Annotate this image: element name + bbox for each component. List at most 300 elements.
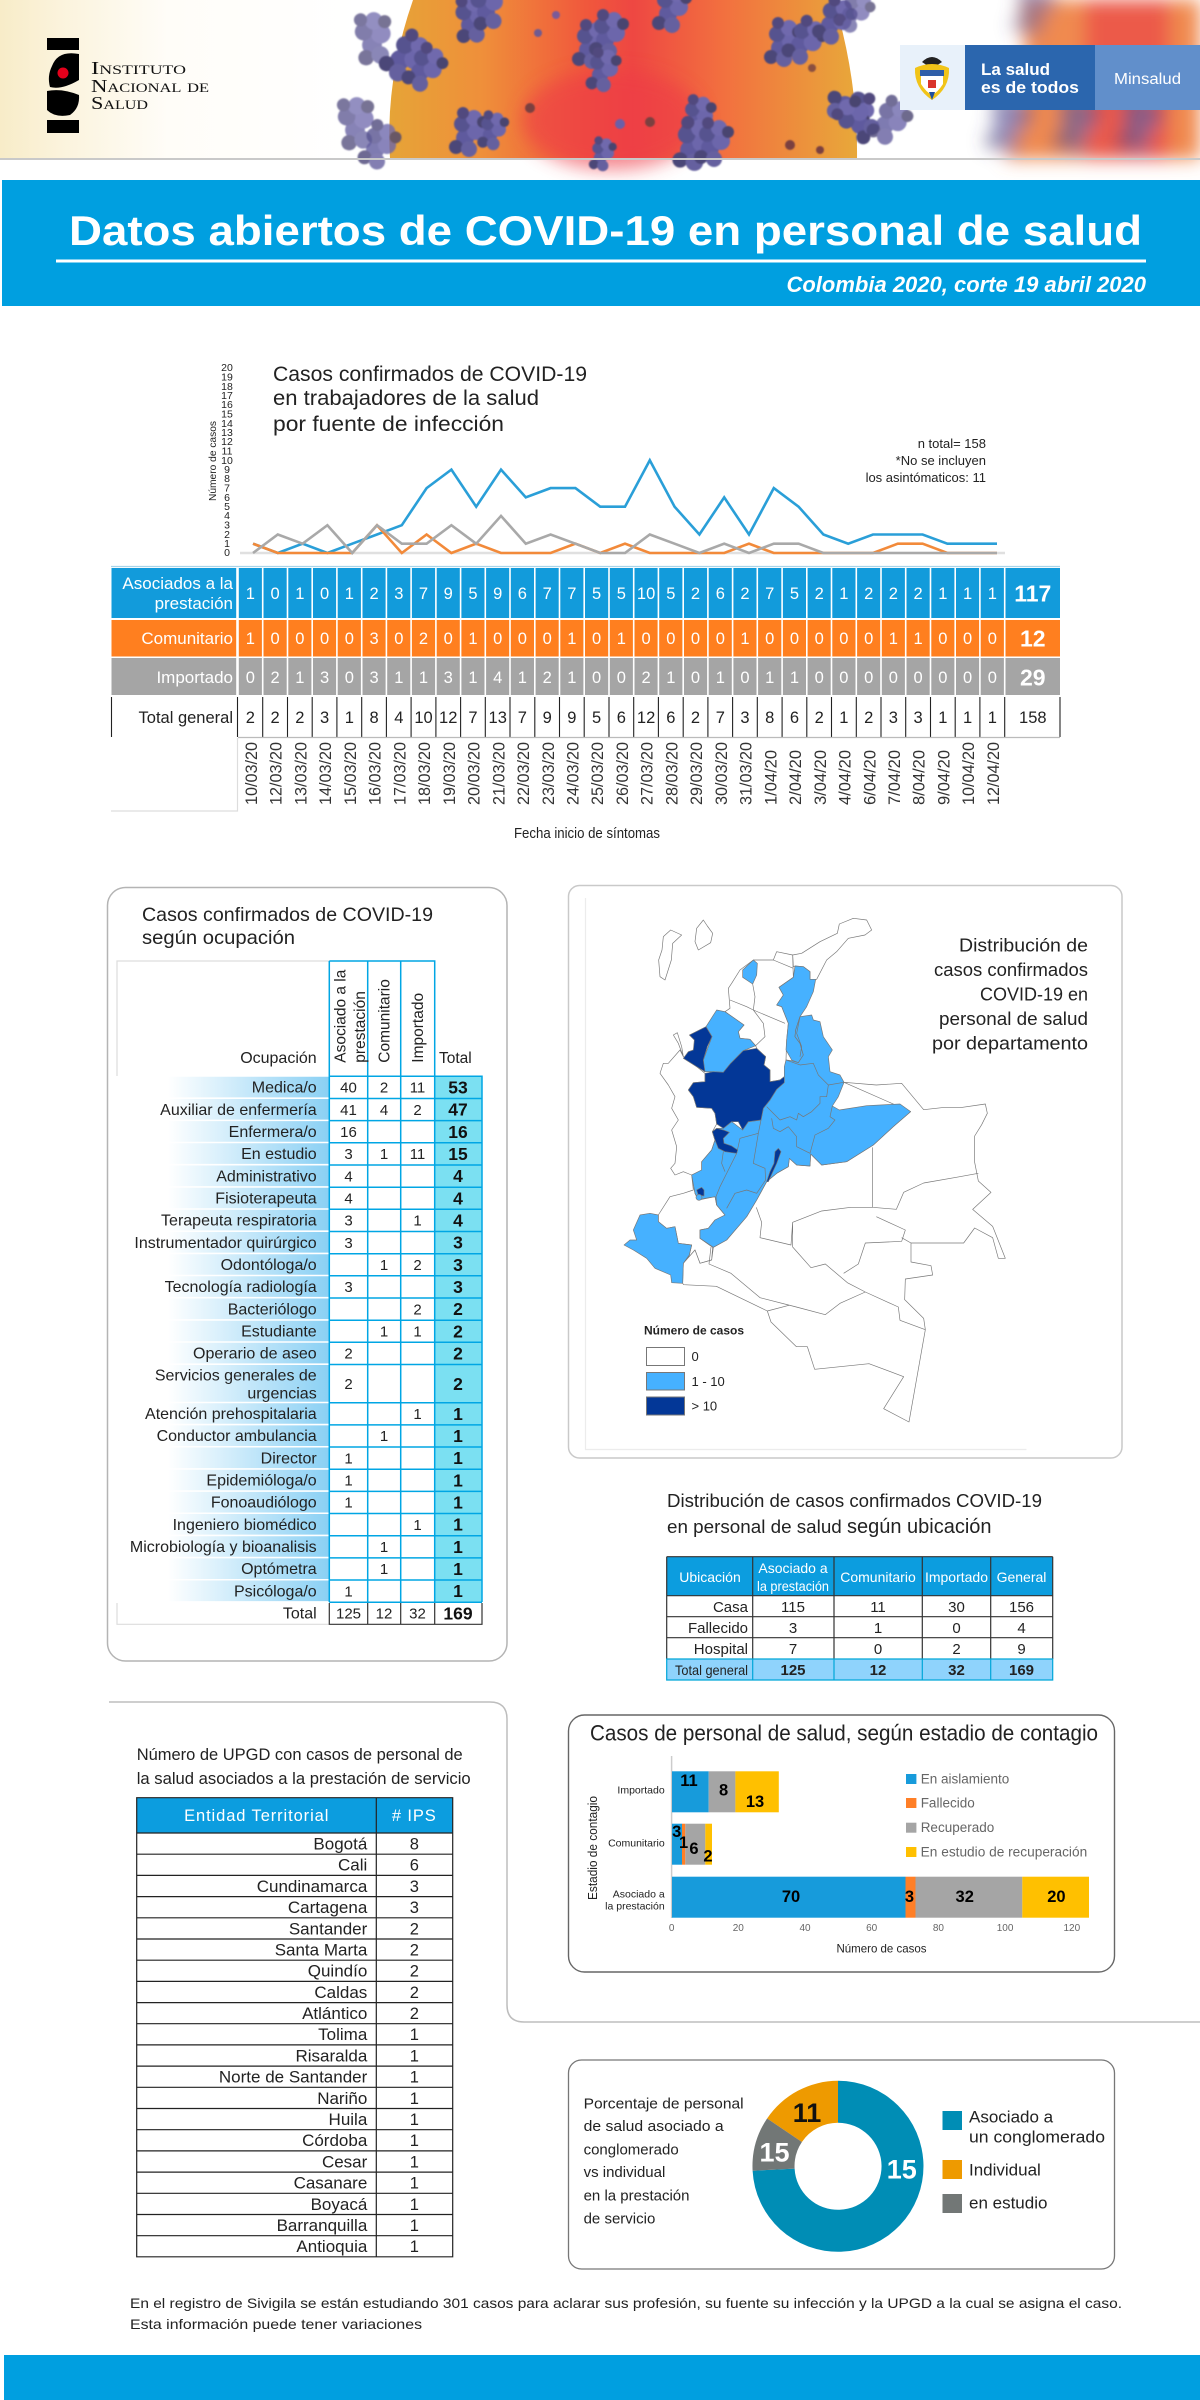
- chart note: n total= 158: [918, 436, 986, 451]
- title: Datos abiertos de COVID-19 en personal de salud: [69, 207, 1142, 254]
- row: Total general: 9: [567, 709, 576, 727]
- y axis labels: 2: [224, 529, 230, 541]
- row: Asociados a la prestación: 7: [419, 585, 428, 603]
- row: Comunitario: 0: [320, 630, 329, 648]
- table body text: 0: [874, 1641, 882, 1658]
- date labels: 12/04/20: [985, 742, 1003, 805]
- row: Comunitario: 1: [740, 630, 750, 648]
- totals column: 169: [443, 1604, 473, 1624]
- row: Total general: Total general: [139, 709, 233, 727]
- map title: personal de salud: [939, 1009, 1088, 1029]
- logo: Instituto Nacional de Salud: [47, 38, 209, 133]
- row: Comunitario: 0: [518, 630, 527, 648]
- column headers: Ocupación: [240, 1050, 317, 1067]
- y axis labels: 14: [221, 418, 233, 430]
- row: Comunitario: 0: [394, 630, 403, 648]
- row labels: Administrativo: [216, 1168, 317, 1185]
- row: Total general: 4: [394, 709, 403, 727]
- row: Importado: 0: [815, 669, 824, 687]
- row: Comunitario: [112, 620, 1060, 656]
- table header text: [679, 1560, 1046, 1594]
- row labels: Fisioterapeuta: [215, 1190, 317, 1208]
- table body text: 32: [948, 1662, 965, 1679]
- cell values: 125: [336, 1606, 361, 1623]
- row: Total general: 8: [765, 709, 774, 727]
- row labels: Enfermera/o: [229, 1124, 317, 1141]
- donut description: vs individual: [584, 2164, 665, 2181]
- row: Asociados a la prestación: prestación: [155, 594, 233, 613]
- cell values: 3: [344, 1146, 353, 1163]
- row: Asociados a la prestación: 0: [271, 585, 280, 603]
- row: Total general: 3: [914, 709, 923, 727]
- bars: Asociado a la prestación: 3: [905, 1888, 914, 1906]
- map legend: Número de casos: [644, 1324, 744, 1338]
- table body text: 156: [1009, 1599, 1034, 1616]
- y axis labels: 6: [224, 492, 230, 504]
- cell values: 32: [409, 1606, 426, 1623]
- row: Comunitario: 1: [567, 630, 576, 648]
- table body text: Total general: [675, 1662, 748, 1678]
- y axis labels: 11: [222, 446, 233, 458]
- totals column: 4: [453, 1188, 463, 1208]
- table body text: 4: [1017, 1620, 1026, 1637]
- row: Importado: 0: [246, 669, 255, 687]
- row: Asociados a la prestación: 1: [938, 585, 947, 603]
- row labels: Tecnología radiología: [165, 1279, 317, 1296]
- row labels: [130, 1080, 317, 1623]
- territorial entities: 1: [410, 2090, 419, 2108]
- logo: La salud es de todos / Minsalud: [900, 45, 1200, 110]
- territorial entities: 2: [410, 1920, 419, 1938]
- table body text: 169: [1009, 1662, 1034, 1679]
- cell values: 16: [340, 1124, 357, 1141]
- cell values: 3: [344, 1279, 353, 1296]
- row: Total general: 1: [345, 709, 354, 727]
- map legend: 1 - 10: [692, 1374, 725, 1389]
- white departments: [793, 918, 872, 979]
- row: Total general: 2: [815, 709, 824, 727]
- donut legend: en estudio: [969, 2193, 1047, 2212]
- date labels: 20/03/20: [466, 742, 484, 805]
- date labels: 13/03/20: [292, 742, 310, 805]
- row: Comunitario: 0: [543, 630, 552, 648]
- row: Importado: 29: [1020, 664, 1046, 690]
- table header text: Asociado a: [758, 1560, 828, 1576]
- row: Total general: 5: [592, 709, 601, 727]
- date labels: 17/03/20: [391, 742, 409, 805]
- row: Asociados a la prestación: 6: [716, 585, 725, 603]
- row: Total general: 1: [988, 709, 997, 727]
- department borders: [716, 1017, 844, 1208]
- row: Asociados a la prestación: 9: [444, 585, 453, 603]
- table body text: Casa: [713, 1599, 749, 1616]
- logo: La salud es de todos / Minsalud: Minsalud: [1114, 71, 1181, 88]
- row: Comunitario: 0: [839, 630, 848, 648]
- row: Importado: 2: [642, 669, 651, 687]
- map title: por departamento: [932, 1033, 1088, 1053]
- date labels: [111, 738, 1003, 811]
- cell values: 1: [413, 1406, 422, 1423]
- bar legend: En aislamiento: [921, 1772, 1009, 1786]
- y axis labels: 5: [224, 501, 230, 513]
- table header text: Entidad Territorial: [184, 1807, 329, 1825]
- occupation table: [117, 961, 482, 1624]
- icon: coat of arms: [915, 57, 949, 100]
- territorial entities: Cundinamarca: [257, 1877, 368, 1896]
- bar legend: Fallecido: [921, 1796, 975, 1811]
- row: Asociados a la prestación: 9: [493, 585, 502, 603]
- panel: cases by location: [667, 1491, 1053, 1680]
- column headers: [240, 969, 472, 1067]
- territorial entities: Casanare: [294, 2174, 367, 2193]
- cell values: 1: [380, 1257, 388, 1274]
- totals column: 47: [448, 1100, 468, 1120]
- donut legend: Asociado a: [969, 2108, 1054, 2127]
- y axis labels: 19: [221, 372, 233, 384]
- category labels: Asociado a: [613, 1889, 665, 1901]
- totals column: 15: [448, 1144, 468, 1164]
- category labels: [605, 1785, 665, 1912]
- row labels: Conductor ambulancia: [157, 1428, 317, 1445]
- row: Asociados a la prestación: 1: [839, 585, 848, 603]
- x axis title: Número de casos: [836, 1942, 926, 1956]
- row: Asociados a la prestación: 2: [691, 585, 700, 603]
- y axis labels: 20: [221, 362, 233, 374]
- totals column: 1: [453, 1537, 463, 1557]
- row: Asociados a la prestación: 0: [320, 585, 329, 603]
- territorial entities: 3: [410, 1899, 419, 1917]
- row: Importado: 1: [666, 669, 675, 687]
- logo: Instituto Nacional de Salud: Salud: [91, 93, 148, 113]
- panel: stacked bar chart by contagion stage: [568, 1715, 1114, 1972]
- bars: Importado: 11: [680, 1772, 698, 1790]
- bar legend: En estudio de recuperación: [921, 1844, 1087, 1860]
- x axis ticks: 40: [799, 1923, 811, 1934]
- panel: cases by occupation: [108, 888, 507, 1661]
- row: Asociados a la prestación: 2: [370, 585, 379, 603]
- row: Comunitario: 0: [271, 630, 280, 648]
- territorial entities: Cali: [338, 1856, 367, 1875]
- row: Importado: 0: [963, 669, 972, 687]
- panel: map by department: [568, 886, 1122, 1458]
- date labels: 8/04/20: [911, 750, 929, 805]
- cell values: 2: [344, 1346, 353, 1363]
- date labels: 22/03/20: [515, 742, 533, 805]
- row label gradient bands: [168, 1077, 329, 1601]
- territorial entities: 1: [410, 2047, 419, 2065]
- totals column: 2: [453, 1299, 463, 1319]
- row: Comunitario: 0: [765, 630, 774, 648]
- row: Total general: [112, 697, 1060, 738]
- row: Comunitario: 1: [889, 630, 898, 648]
- row: Total general: 3: [889, 709, 898, 727]
- column headers: Importado: [410, 993, 427, 1063]
- totals column: 16: [448, 1122, 468, 1142]
- row labels: Fonoaudiólogo: [211, 1495, 317, 1512]
- totals column: 1: [453, 1515, 463, 1535]
- row: Comunitario: 1: [468, 630, 478, 648]
- totals column: 2: [453, 1374, 463, 1394]
- territorial entities: [219, 1834, 419, 2256]
- date labels: 14/03/20: [317, 742, 335, 805]
- row: Total general: 2: [271, 709, 280, 727]
- row: Importado: 0: [617, 669, 626, 687]
- row: Comunitario: 3: [370, 630, 379, 648]
- table body text: 1: [874, 1620, 882, 1637]
- row: Comunitario: 0: [988, 630, 997, 648]
- bars: Asociado a la prestación: [672, 1877, 1089, 1918]
- row: Comunitario: 0: [493, 630, 502, 648]
- date labels: 27/03/20: [639, 742, 657, 805]
- y axis title: Número de casos: [207, 421, 219, 501]
- totals column: 4: [453, 1210, 463, 1230]
- territorial entities: 2: [410, 1942, 419, 1960]
- y axis labels: 7: [224, 482, 230, 494]
- line chart heading: en trabajadores de la salud: [273, 387, 539, 410]
- territorial entities: Caldas: [314, 1983, 367, 2002]
- row: Total general: 7: [468, 709, 478, 727]
- row labels: Epidemióloga/o: [206, 1472, 317, 1490]
- row: Asociados a la prestación: 5: [790, 585, 799, 603]
- logo: Instituto Nacional de Salud: Nacional de: [91, 76, 209, 96]
- location heading: [667, 1491, 1042, 1538]
- cell values: 2: [413, 1301, 422, 1318]
- date labels: 28/03/20: [663, 742, 681, 805]
- row: Asociados a la prestación: 7: [543, 585, 552, 603]
- category labels: Comunitario: [608, 1838, 665, 1850]
- row: Importado: 1: [468, 669, 478, 687]
- row: Asociados a la prestación: [112, 568, 1060, 618]
- logo: La salud es de todos / Minsalud: La salud: [981, 60, 1050, 79]
- cell values: 1: [344, 1583, 353, 1600]
- territorial entities: 8: [410, 1836, 419, 1854]
- row labels: Total: [283, 1606, 317, 1623]
- map title: [932, 936, 1088, 1053]
- territorial entities: Atlántico: [302, 2004, 367, 2023]
- footer band: [4, 2355, 1200, 2400]
- row labels: Atención prehospitalaria: [145, 1406, 317, 1423]
- row: Asociados a la prestación: 2: [815, 585, 824, 603]
- row: Comunitario: 0: [691, 630, 700, 648]
- row: Importado: 0: [592, 669, 601, 687]
- y axis labels: 9: [224, 464, 230, 476]
- row: Total general: 3: [740, 709, 750, 727]
- row: Comunitario: 0: [295, 630, 304, 648]
- totals column: 1: [453, 1559, 463, 1579]
- totals column: 1: [453, 1493, 463, 1513]
- row: Asociados a la prestación: 1: [295, 585, 304, 603]
- table body text: 3: [789, 1620, 797, 1637]
- row: Importado: 0: [914, 669, 923, 687]
- column headers: Comunitario: [376, 979, 394, 1063]
- date labels: 26/03/20: [614, 742, 632, 805]
- x axis ticks: 20: [733, 1923, 744, 1934]
- territorial entities: Norte de Santander: [219, 2068, 368, 2087]
- chart note: *No se incluyen: [896, 453, 986, 468]
- cell values: 4: [380, 1102, 388, 1119]
- row: Total general: 1: [963, 709, 972, 727]
- row: Comunitario: 1: [914, 630, 923, 648]
- territorial entities: Antioquia: [296, 2237, 368, 2256]
- line chart heading: Casos confirmados de COVID-19: [273, 363, 587, 386]
- cell values: 3: [344, 1213, 353, 1230]
- row labels: Ingeniero biomédico: [173, 1517, 317, 1534]
- date labels: 3/04/20: [812, 750, 830, 805]
- date labels: 19/03/20: [441, 742, 459, 805]
- y axis labels: 13: [221, 427, 233, 439]
- row: Importado: 1: [419, 669, 428, 687]
- totals column: 3: [453, 1255, 463, 1275]
- row: Total general: 9: [543, 709, 552, 727]
- cell values: 1: [344, 1472, 353, 1490]
- bars: Comunitario: 3: [672, 1823, 681, 1841]
- row: Importado: 3: [320, 669, 329, 687]
- bars: Asociado a la prestación: 20: [1047, 1888, 1066, 1906]
- table body text: 125: [780, 1662, 806, 1679]
- table body text: Fallecido: [688, 1620, 748, 1637]
- bar legend: Recuperado: [921, 1820, 994, 1835]
- subtitle: Colombia 2020, corte 19 abril 2020: [786, 272, 1147, 297]
- map legend: > 10: [692, 1398, 717, 1414]
- date labels: 9/04/20: [935, 750, 953, 805]
- row: Asociados a la prestación: Asociados a la: [122, 574, 234, 593]
- row: Comunitario: 1: [617, 630, 626, 648]
- row: Asociados a la prestación: 10: [637, 585, 655, 603]
- row: Comunitario: Comunitario: [141, 629, 233, 648]
- location heading: Distribución de casos confirmados COVID-19: [667, 1491, 1042, 1511]
- row: Importado: 1: [765, 669, 774, 687]
- table header text: [184, 1807, 437, 1825]
- row: Importado: 1: [716, 669, 725, 687]
- totals column: [443, 1078, 473, 1624]
- cell values: 40: [340, 1080, 357, 1097]
- territorial entities: 1: [410, 2217, 419, 2235]
- row labels: Terapeuta respiratoria: [161, 1213, 317, 1230]
- row: Asociados a la prestación: 1: [345, 585, 354, 603]
- cell values: 12: [376, 1606, 392, 1623]
- line chart heading: por fuente de infección: [273, 413, 504, 436]
- row: Total general: 12: [439, 709, 457, 727]
- column headers: Total: [439, 1050, 472, 1067]
- UPGD table: [137, 1798, 453, 2257]
- row: Comunitario: 0: [345, 630, 354, 648]
- cell values: 1: [380, 1561, 388, 1578]
- row: Asociados a la prestación: 5: [666, 585, 675, 603]
- row: Importado: 2: [271, 669, 280, 687]
- territorial entities: 1: [410, 2026, 419, 2044]
- row labels: Servicios generales de: [155, 1368, 317, 1385]
- row: Total general: 6: [666, 709, 675, 727]
- x axis ticks: 120: [1063, 1923, 1081, 1934]
- dark blue departments: [688, 1048, 784, 1130]
- territorial entities: Huila: [329, 2110, 368, 2129]
- bars: Importado: [672, 1771, 779, 1812]
- map title: casos confirmados: [934, 960, 1088, 980]
- row: Total general: 3: [320, 709, 329, 727]
- cell values: 3: [344, 1235, 353, 1252]
- table header text: Comunitario: [840, 1569, 916, 1585]
- territorial entities: Cartagena: [288, 1898, 368, 1917]
- table header text: Ubicación: [679, 1569, 741, 1585]
- row: Total general: 6: [790, 709, 799, 727]
- date labels: 29/03/20: [688, 742, 706, 805]
- bar legend: [906, 1772, 1087, 1860]
- y axis labels: 1: [224, 538, 230, 550]
- territorial entities: Nariño: [317, 2089, 367, 2108]
- row: Asociados a la prestación: 2: [914, 585, 923, 603]
- logo: Instituto Nacional de Salud: Instituto: [91, 58, 186, 78]
- date labels: 21/03/20: [490, 742, 508, 805]
- occupation heading: según ocupación: [142, 927, 295, 949]
- row: Asociados a la prestación: 2: [864, 585, 873, 603]
- date labels: 30/03/20: [713, 742, 731, 805]
- totals column: 53: [448, 1078, 468, 1098]
- x axis title: Fecha inicio de síntomas: [514, 825, 660, 842]
- donut chart: 11: [793, 2098, 821, 2128]
- row: Total general: 7: [518, 709, 527, 727]
- table body text: Hospital: [694, 1641, 748, 1658]
- y axis labels: 4: [224, 510, 230, 522]
- donut description: [584, 2095, 744, 2227]
- column headers: prestación: [352, 991, 369, 1063]
- totals column: 2: [453, 1321, 463, 1341]
- location heading: en personal de salud según ubicación: [667, 1516, 992, 1538]
- cell values: 11: [410, 1080, 425, 1097]
- bars: Comunitario: 1: [679, 1834, 688, 1852]
- cell values: 1: [413, 1324, 422, 1340]
- y axis labels: 0: [224, 547, 230, 559]
- panel frame: UPGD section outline: [109, 1702, 1200, 2022]
- totals column: 1: [453, 1470, 463, 1490]
- donut description: Porcentaje de personal: [584, 2095, 744, 2112]
- y axis labels: 12: [221, 436, 233, 448]
- row: Total general: 13: [489, 709, 507, 727]
- totals column: 1: [453, 1404, 463, 1424]
- territorial entities: Tolima: [318, 2025, 368, 2044]
- row: Importado: 4: [493, 669, 502, 687]
- y axis labels: 3: [224, 520, 230, 532]
- map of Colombia: [624, 918, 1005, 1422]
- bars: Asociado a la prestación: 70: [782, 1888, 800, 1906]
- row: Asociados a la prestación: 1: [963, 585, 972, 603]
- row: Importado: 1: [394, 669, 403, 687]
- footnote: [130, 2295, 1122, 2332]
- row: Asociados a la prestación: 5: [468, 585, 478, 603]
- cell values: 2: [413, 1257, 422, 1274]
- column headers: Asociado a la: [332, 969, 350, 1063]
- cell values: 1: [344, 1495, 353, 1512]
- territorial entities: Cesar: [322, 2152, 368, 2171]
- row: Comunitario: 0: [666, 630, 675, 648]
- panel: line chart by infection source: [111, 362, 1060, 842]
- cell values: 11: [410, 1146, 425, 1163]
- date labels: 31/03/20: [738, 742, 756, 805]
- header banner: coronavirus artwork: [0, 0, 1200, 173]
- panel: donut conglomerate vs individual: [568, 2060, 1114, 2269]
- location table: [667, 1557, 1053, 1680]
- x axis ticks: 0: [669, 1923, 675, 1934]
- row: Importado: 0: [740, 669, 750, 687]
- row: Comunitario: 1: [246, 630, 255, 648]
- territorial entities: 2: [410, 2005, 419, 2023]
- donut description: conglomerado: [584, 2141, 679, 2158]
- map title: Distribución de: [959, 936, 1088, 956]
- y axis labels: 18: [221, 381, 233, 393]
- table body text: 0: [952, 1620, 961, 1637]
- row labels: Psicóloga/o: [234, 1583, 317, 1600]
- cell values: 2: [344, 1376, 353, 1393]
- donut legend: Individual: [969, 2161, 1041, 2180]
